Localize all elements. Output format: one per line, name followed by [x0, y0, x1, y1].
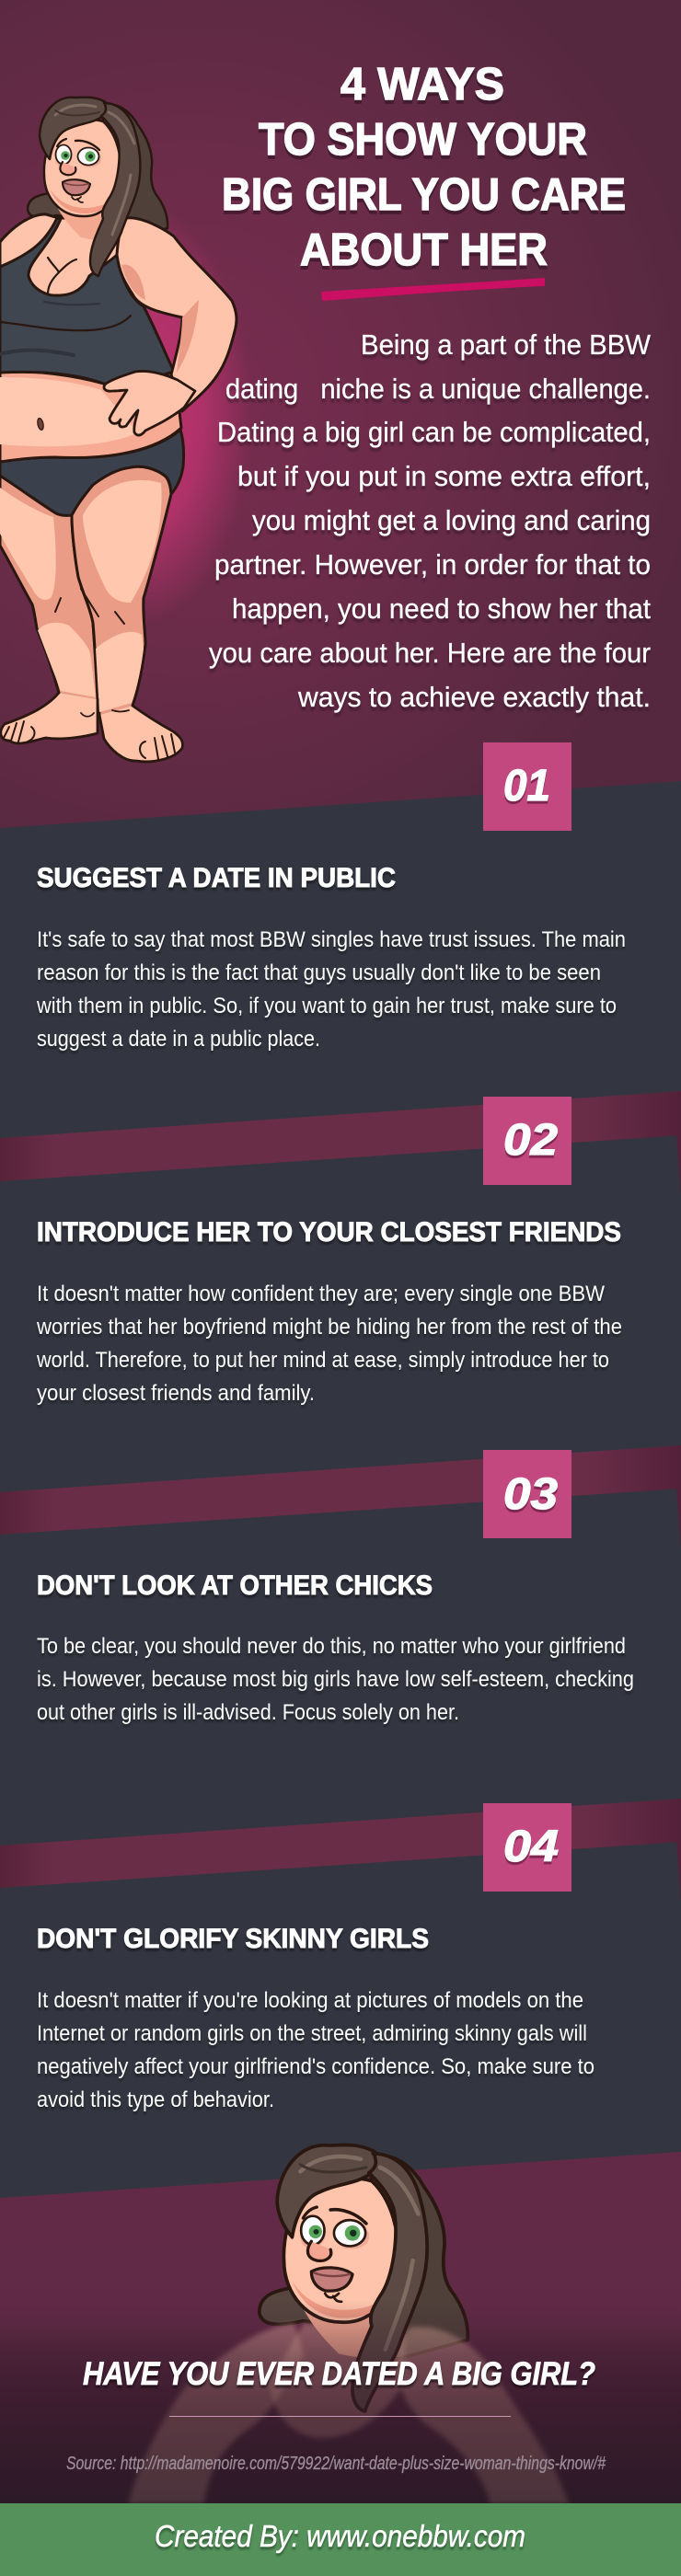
badge 01: 01 [503, 762, 550, 811]
intro paragraph: you might get a loving and caring [252, 504, 651, 536]
body 01: suggest a date in a public place. [37, 1027, 320, 1052]
intro paragraph: Being a part of the BBW [361, 328, 652, 361]
footer credit: Created By: www.onebbw.com [155, 2519, 525, 2553]
belly [0, 371, 181, 462]
ribbon 02 [0, 1091, 681, 1196]
arm [117, 218, 237, 411]
footer bar [0, 2503, 681, 2576]
badge 02: 02 [503, 1116, 558, 1165]
title: ABOUT HER [300, 225, 548, 275]
intro paragraph: happen, you need to show her that [232, 592, 651, 625]
body 04: It doesn't matter if you're looking at pictures of models on the [37, 1988, 583, 2013]
body 03: To be clear, you should never do this, no matter who your girlfriend [37, 1634, 626, 1659]
closing question: HAVE YOU EVER DATED A BIG GIRL? [83, 2356, 595, 2392]
fade overlay [0, 2300, 681, 2504]
heading 02: INTRODUCE HER TO YOUR CLOSEST FRIENDS [37, 1217, 621, 1248]
badge 04 [483, 1803, 571, 1892]
cleavage lines [48, 258, 76, 294]
title: TO SHOW YOUR [259, 115, 587, 165]
body 01: It's safe to say that most BBW singles have trust issues. The main [37, 927, 626, 952]
divider [169, 2416, 511, 2417]
portrait head [277, 2145, 427, 2411]
body 03: is. However, because most big girls have low self-esteem, checking [37, 1667, 634, 1692]
body 03: out other girls is ill-advised. Focus solely on her. [37, 1700, 459, 1725]
back hair [28, 104, 167, 241]
legs [0, 466, 171, 715]
body 02 [36, 1282, 622, 1406]
navel [37, 418, 44, 431]
body 03 [37, 1634, 634, 1725]
intro paragraph: partner. However, in order for that to [214, 548, 651, 581]
intro paragraph: but if you put in some extra effort, [237, 460, 651, 492]
body 01 [36, 927, 626, 1052]
body 04 [37, 1988, 594, 2112]
title: 4 WAYS [340, 60, 504, 109]
tank top [0, 218, 174, 385]
body 04: avoid this type of behavior. [37, 2087, 274, 2112]
top folds [0, 302, 131, 355]
closing panel background [0, 2152, 681, 2504]
header background [0, 0, 681, 846]
ribbon 04 [0, 1799, 681, 1903]
intro paragraph: you care about her. Here are the four [209, 637, 651, 669]
illustration: full-body woman [0, 98, 237, 762]
badge 01 [483, 742, 571, 831]
head [40, 98, 140, 276]
heading 04: DON'T GLORIFY SKINNY GIRLS [37, 1924, 429, 1954]
title [222, 60, 626, 275]
badge 04: 04 [503, 1823, 559, 1871]
section 02 [0, 1091, 681, 1406]
title underline brush [321, 278, 545, 301]
body 02: your closest friends and family. [37, 1381, 315, 1406]
faded torso [128, 2323, 569, 2504]
underwear [0, 430, 184, 515]
badge 02 [483, 1097, 571, 1185]
intro paragraph [209, 328, 652, 713]
body 04: negatively affect your girlfriend's confidence. So, make sure to [37, 2054, 594, 2079]
body 04: Internet or random girls on the street, admiring skinny gals will [37, 2021, 587, 2046]
body 02: world. Therefore, to put her mind at ease, simply introduce her to [36, 1348, 609, 1373]
feet [1, 693, 182, 762]
section 01 [36, 742, 626, 1052]
heading 03: DON'T LOOK AT OTHER CHICKS [37, 1570, 433, 1601]
dark content panel [0, 781, 681, 2198]
body 01: reason for this is the fact that guys usually don't like to be seen [37, 960, 601, 985]
body 02: It doesn't matter how confident they are; every single one BBW [37, 1282, 605, 1306]
body 01: with them in public. So, if you want to gain her trust, make sure to [36, 994, 617, 1018]
heading 01: SUGGEST A DATE IN PUBLIC [37, 863, 396, 893]
badge 03 [483, 1450, 571, 1538]
body 02: worries that her boyfriend might be hiding her from the rest of the [36, 1315, 622, 1340]
back hair of portrait [260, 2155, 467, 2359]
section 04 [0, 1799, 681, 2112]
intro paragraph: dating niche is a unique challenge. [225, 373, 651, 405]
title: BIG GIRL YOU CARE [222, 170, 626, 220]
section 03 [0, 1445, 681, 1725]
intro paragraph: Dating a big girl can be complicated, [217, 416, 651, 448]
badge 03: 03 [503, 1470, 558, 1519]
upper chest skin [0, 214, 126, 304]
hand [104, 371, 195, 435]
illustration: woman portrait fading out [0, 2145, 681, 2504]
ribbon 03 [0, 1445, 681, 1549]
intro paragraph: ways to achieve exactly that. [297, 681, 651, 713]
